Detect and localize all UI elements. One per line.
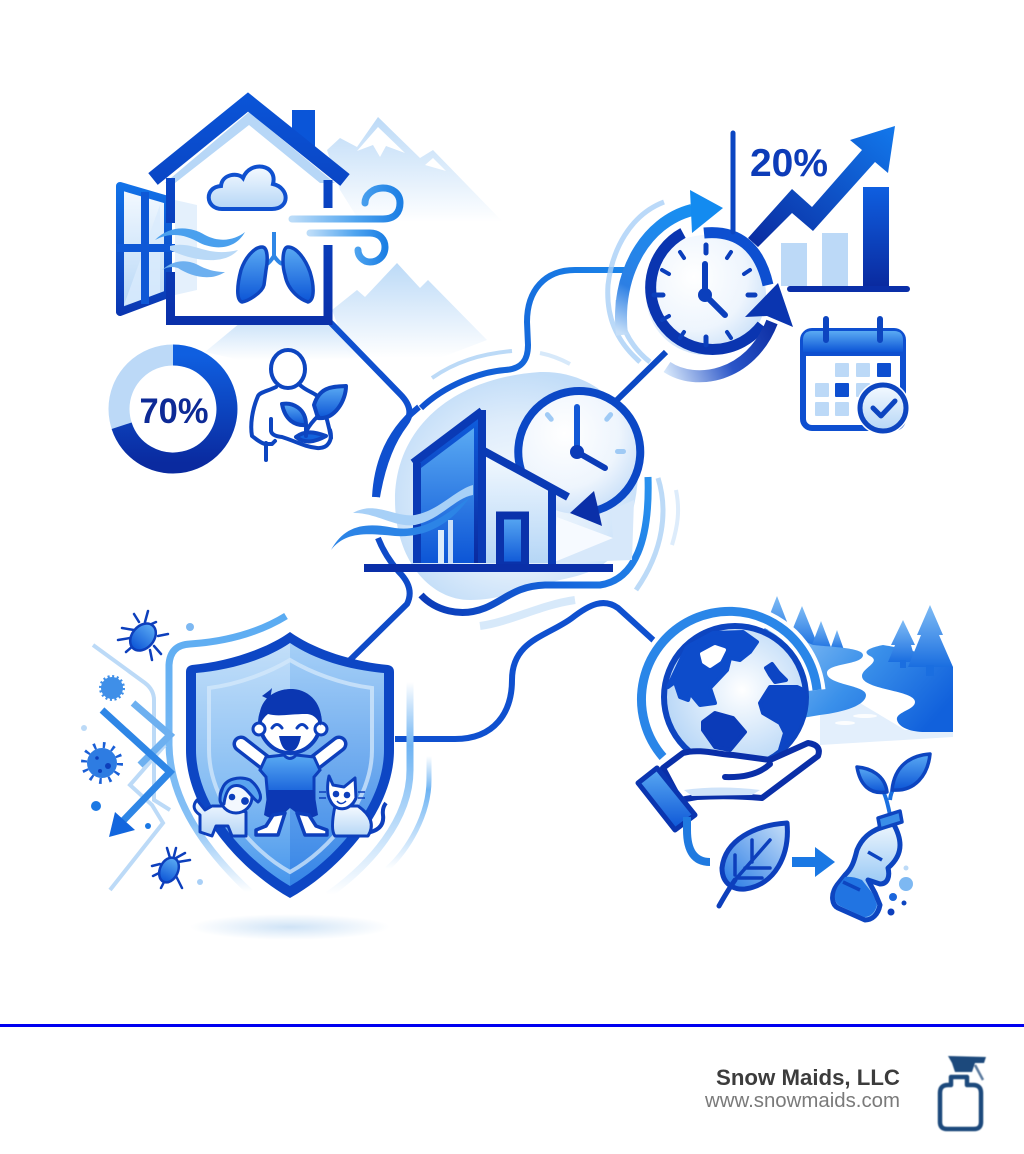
rings xyxy=(651,233,762,349)
bounce chevron xyxy=(133,703,170,765)
house illustration xyxy=(117,102,400,320)
cloud xyxy=(209,167,286,209)
mountains behind house xyxy=(205,117,503,360)
head xyxy=(260,693,320,753)
clock xyxy=(515,390,640,526)
connector: shield to globe xyxy=(395,603,662,739)
face xyxy=(272,724,307,728)
globe xyxy=(664,626,806,768)
light zigzags xyxy=(93,645,170,890)
lower arrow xyxy=(667,283,793,376)
hair xyxy=(259,689,321,726)
left arc xyxy=(375,407,419,497)
lungs xyxy=(238,232,313,302)
icon: spray bottle xyxy=(940,1056,986,1129)
small mite xyxy=(152,848,190,888)
growth arrow xyxy=(748,126,895,247)
wind curls xyxy=(292,188,400,262)
shield body xyxy=(186,632,394,898)
bounced arrow xyxy=(102,710,170,824)
motion arcs xyxy=(608,202,664,362)
dog xyxy=(194,778,260,836)
continents xyxy=(668,632,757,705)
chimney xyxy=(292,110,315,158)
upper arrow xyxy=(621,190,723,335)
arms xyxy=(241,744,339,765)
far trees xyxy=(758,596,844,650)
curved connector xyxy=(687,817,710,862)
icon: person holding plant xyxy=(251,350,346,460)
percent label: 20% xyxy=(750,142,828,185)
cuff xyxy=(638,768,695,830)
shirt xyxy=(260,755,320,800)
vertical axis xyxy=(730,133,736,232)
hub xyxy=(698,288,712,302)
ring xyxy=(641,611,817,757)
shield scene xyxy=(169,616,429,940)
footer website: www.snowmaids.com xyxy=(704,1090,900,1112)
arc: upper flowing line xyxy=(421,270,625,408)
globe in hand xyxy=(638,611,930,920)
donut chart 70% xyxy=(119,355,227,463)
outer halo xyxy=(169,616,429,895)
bottle and sprout xyxy=(833,754,930,920)
hands xyxy=(705,264,725,315)
icon: calendar xyxy=(803,319,910,435)
boy xyxy=(241,688,339,835)
faint motion strokes xyxy=(432,351,678,626)
central illustration xyxy=(331,270,678,626)
window xyxy=(117,186,197,312)
axis xyxy=(790,286,907,292)
leaf xyxy=(719,823,787,906)
inner roof shade xyxy=(165,112,335,183)
beetle xyxy=(118,611,168,660)
house xyxy=(364,410,613,572)
breeze xyxy=(331,485,473,550)
face xyxy=(646,235,766,355)
particles xyxy=(899,877,913,891)
shadow xyxy=(190,914,390,940)
germs xyxy=(102,678,122,698)
big clock with arrows xyxy=(608,190,793,376)
arc: lower flowing line xyxy=(421,477,648,612)
walls xyxy=(170,178,328,320)
ground line xyxy=(364,564,613,572)
legs and feet xyxy=(256,813,327,835)
footer brand name: Snow Maids, LLC xyxy=(716,1065,900,1090)
landscape: trees and river xyxy=(758,596,953,745)
near trees xyxy=(888,605,953,676)
cat xyxy=(319,776,386,836)
connector: centre to shield xyxy=(350,538,410,660)
bars xyxy=(781,243,807,286)
bar chart with growth arrow xyxy=(733,126,907,289)
footer rule xyxy=(0,1024,1024,1027)
white wedge below arrow xyxy=(552,500,634,563)
background blob xyxy=(395,372,638,600)
air wisps through window xyxy=(155,228,245,277)
donut chart 70%: 70% xyxy=(140,392,208,431)
connector: house to centre xyxy=(328,320,409,497)
roof xyxy=(153,102,345,180)
connector: centre clock to big clock xyxy=(617,352,666,400)
hand xyxy=(638,743,819,830)
ticks xyxy=(654,245,755,345)
plant xyxy=(314,386,346,418)
deflection arrows and germs xyxy=(81,611,203,890)
shorts xyxy=(264,790,318,818)
dots xyxy=(186,623,194,631)
arrow xyxy=(792,847,835,877)
